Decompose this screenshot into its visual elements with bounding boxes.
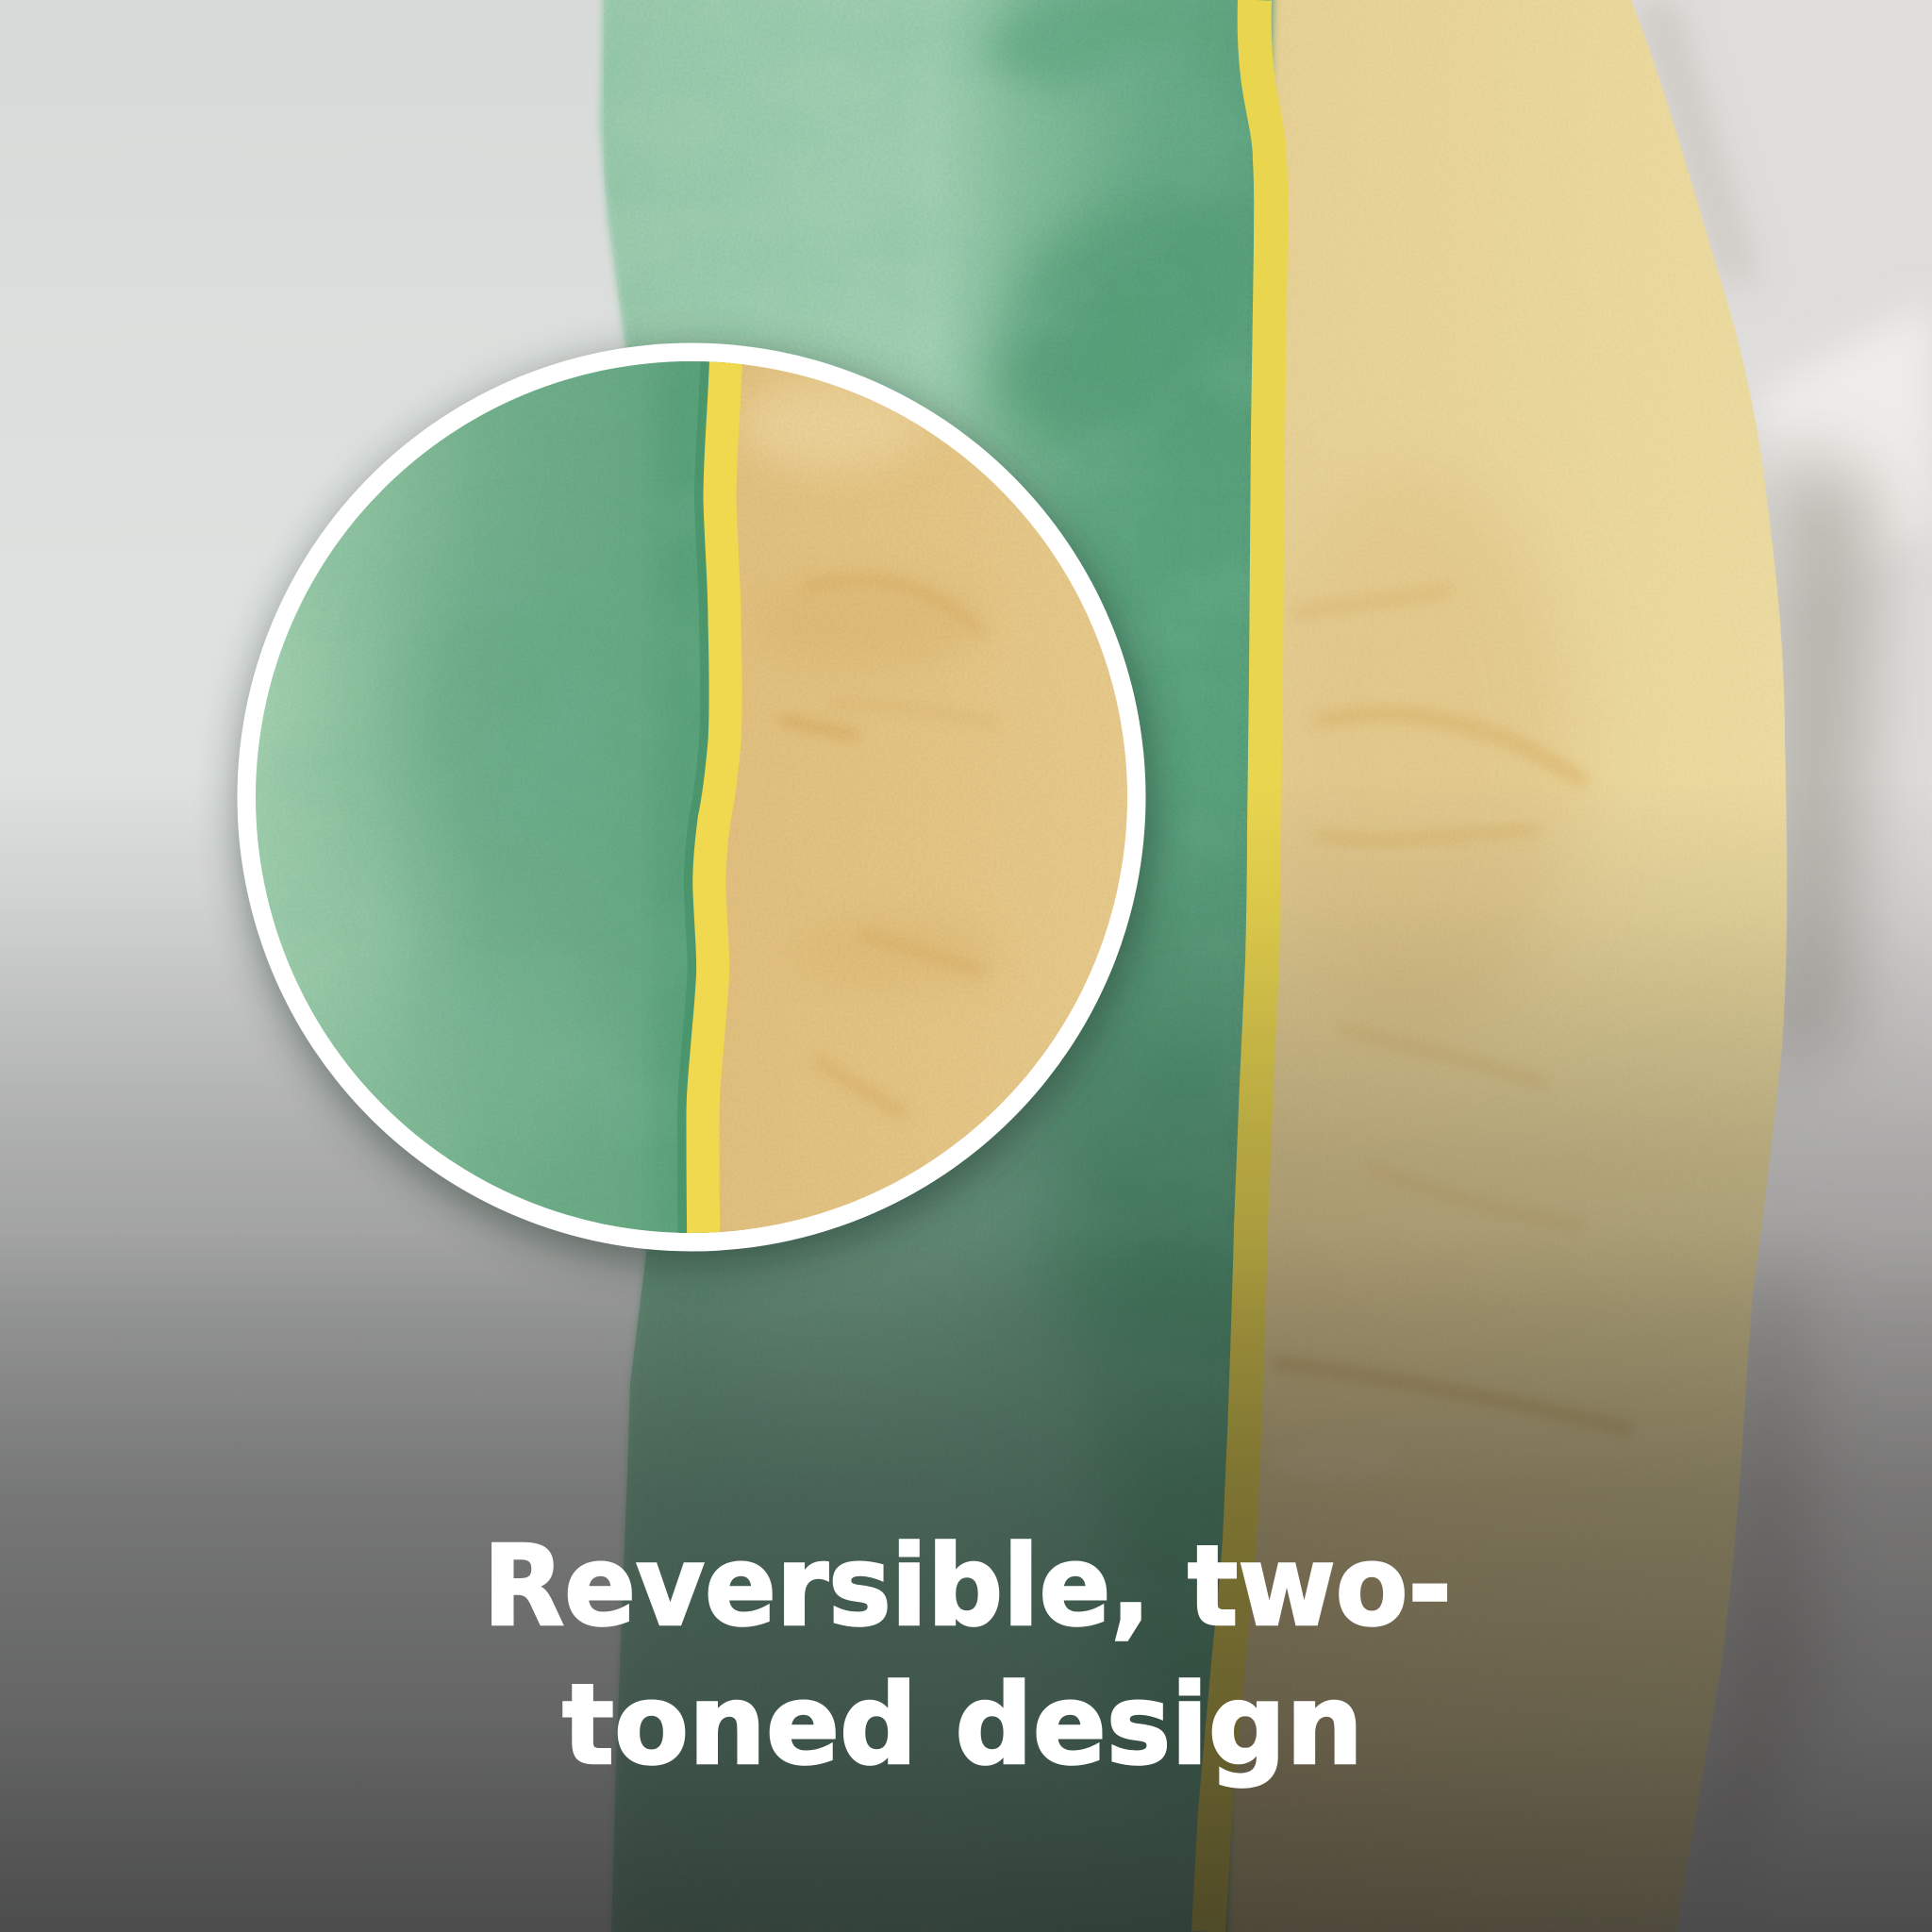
- headline: Reversible, two-: [483, 1521, 1452, 1651]
- callout white ring: [238, 343, 1145, 1251]
- pillow: velvet texture: [1226, 0, 1792, 1932]
- headline: toned design: [562, 1659, 1363, 1790]
- pillow: cream side: [1210, 0, 1787, 1932]
- pillow: yellow piping seam: [1208, 0, 1271, 1932]
- bottom dark gradient overlay: [0, 776, 1932, 1932]
- callout fabric close-up: [236, 349, 1141, 1255]
- headline: [483, 1521, 1452, 1790]
- callout drop shadow: [240, 353, 1153, 1266]
- magnified detail callout: [236, 343, 1153, 1266]
- pillow: green side: [600, 0, 1274, 1932]
